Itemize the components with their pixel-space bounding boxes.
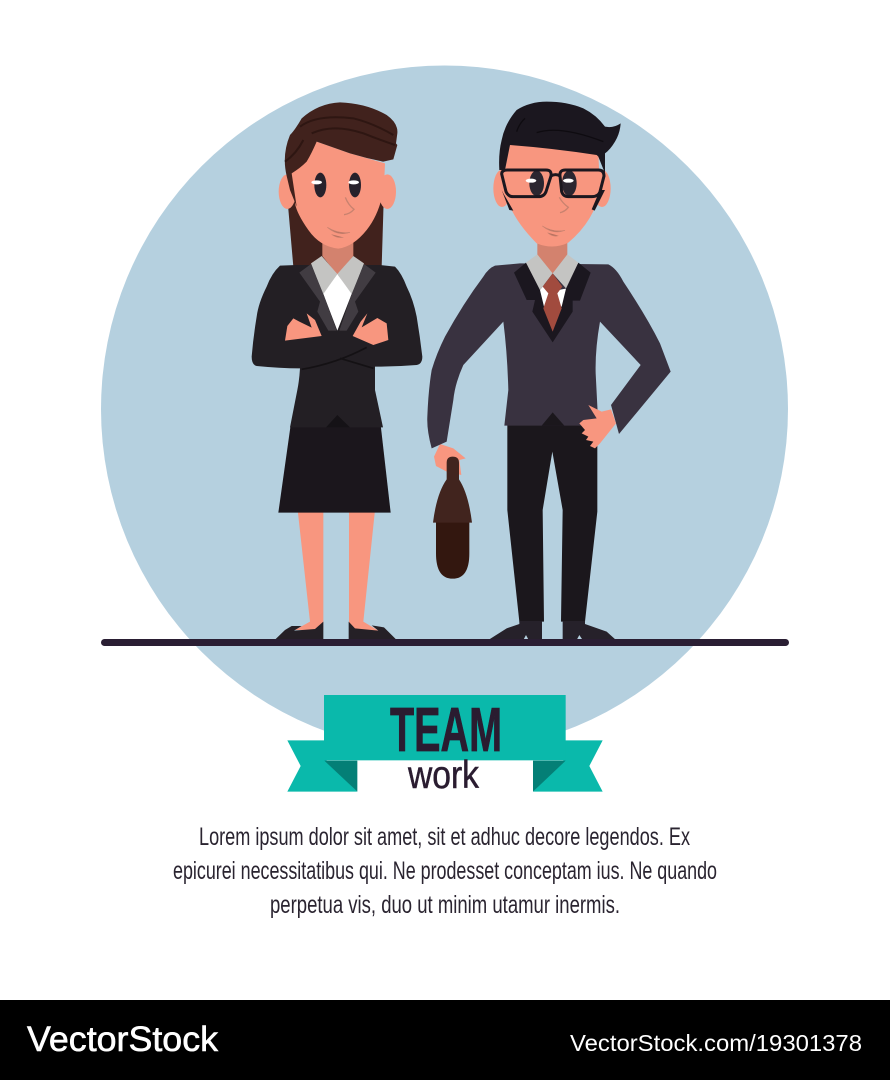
hand on hip: [579, 405, 616, 448]
left fold: [324, 761, 357, 792]
man legs, shoes and briefcase: [433, 423, 616, 640]
footer bar: [0, 1000, 890, 1080]
woman legs and shoes: [276, 425, 397, 640]
subheading: work: work: [407, 754, 479, 797]
footer url text: VectorStock.com/19301378: [570, 1030, 862, 1056]
ribbon banner: [287, 695, 603, 792]
glasses: [502, 170, 604, 197]
ribbon main band: [324, 695, 566, 760]
body text: Lorem ipsum dolor sit amet, sit et adhuc decore legendos. Ex: [199, 823, 690, 851]
right fold: [533, 761, 566, 792]
man shoes: [488, 621, 616, 640]
figure: man: [427, 102, 671, 640]
body text: [173, 823, 717, 919]
ground line: [101, 639, 789, 646]
body text: perpetua vis, duo ut minim utamur inermis.: [270, 891, 620, 919]
figure: woman: [252, 102, 422, 640]
background circle: [101, 66, 788, 752]
left ribbon tail: [287, 740, 357, 792]
right ribbon tail: [533, 740, 603, 792]
hand holding briefcase: [434, 444, 466, 475]
trousers: [507, 423, 597, 622]
briefcase: [433, 457, 472, 579]
woman head and torso: [252, 102, 422, 427]
footer logo text: VectorStock: [27, 1020, 219, 1059]
man head and torso: [427, 102, 671, 448]
heading: TEAM: TEAM: [390, 696, 502, 765]
